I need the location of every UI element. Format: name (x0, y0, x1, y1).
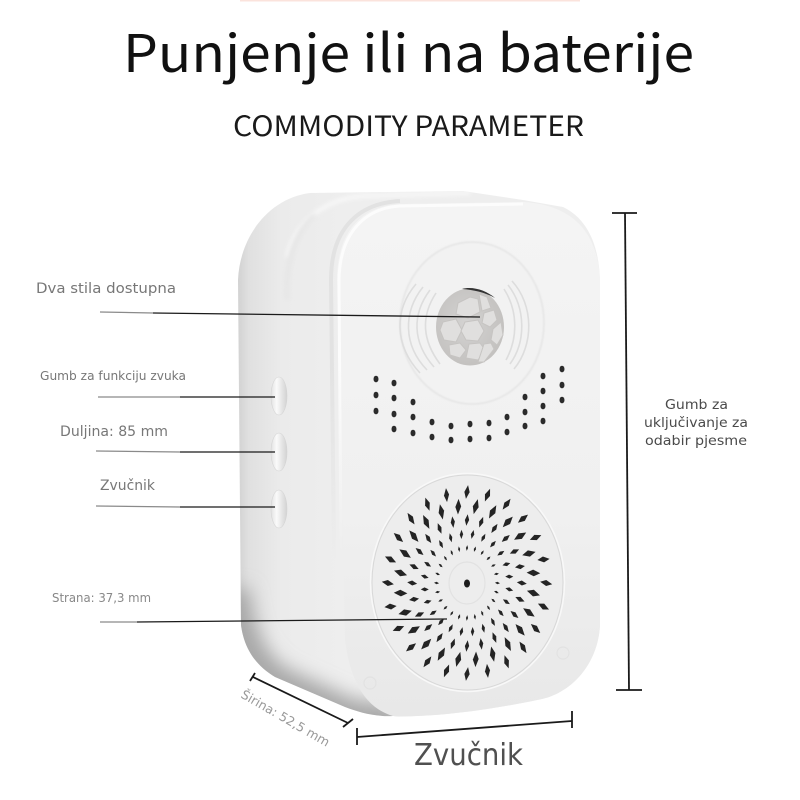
body underside shading (232, 193, 470, 722)
label: bottom speaker: Zvučnik (414, 738, 524, 773)
speaker grille (368, 469, 566, 697)
device body side (238, 191, 600, 716)
label: two styles: Dva stila dostupna (36, 281, 176, 297)
upper speaker dots (374, 366, 564, 443)
front face edge highlight (329, 199, 522, 444)
label: power button: uključivanje za (644, 415, 748, 431)
label: side: Strana: 37,3 mm (52, 591, 151, 605)
subtitle: COMMODITY PARAMETER (233, 105, 584, 145)
device front face (337, 202, 600, 716)
label: sound function button: Gumb za funkciju zvuka (40, 368, 186, 383)
screw marks (364, 647, 569, 689)
width dimension line (250, 673, 353, 727)
sensor recess (400, 242, 544, 404)
label: power button: odabir pjesme (645, 433, 747, 449)
PIR sensor lens (436, 288, 504, 366)
sensor ripple arcs (400, 281, 529, 373)
title: Punjenje ili na baterije (123, 12, 694, 87)
device illustration (232, 191, 600, 722)
label: power button: Gumb za (665, 397, 728, 413)
height dimension line (612, 213, 642, 690)
label: speaker: Zvučnik (100, 478, 156, 494)
label: power button (644, 397, 748, 449)
top edge tint (240, 0, 580, 2)
length dimension line (357, 711, 572, 745)
label: length: Duljina: 85 mm (60, 424, 168, 440)
pointer lines (96, 312, 480, 622)
side buttons (271, 377, 287, 528)
label: width: Širina: 52,5 mm (238, 687, 333, 750)
